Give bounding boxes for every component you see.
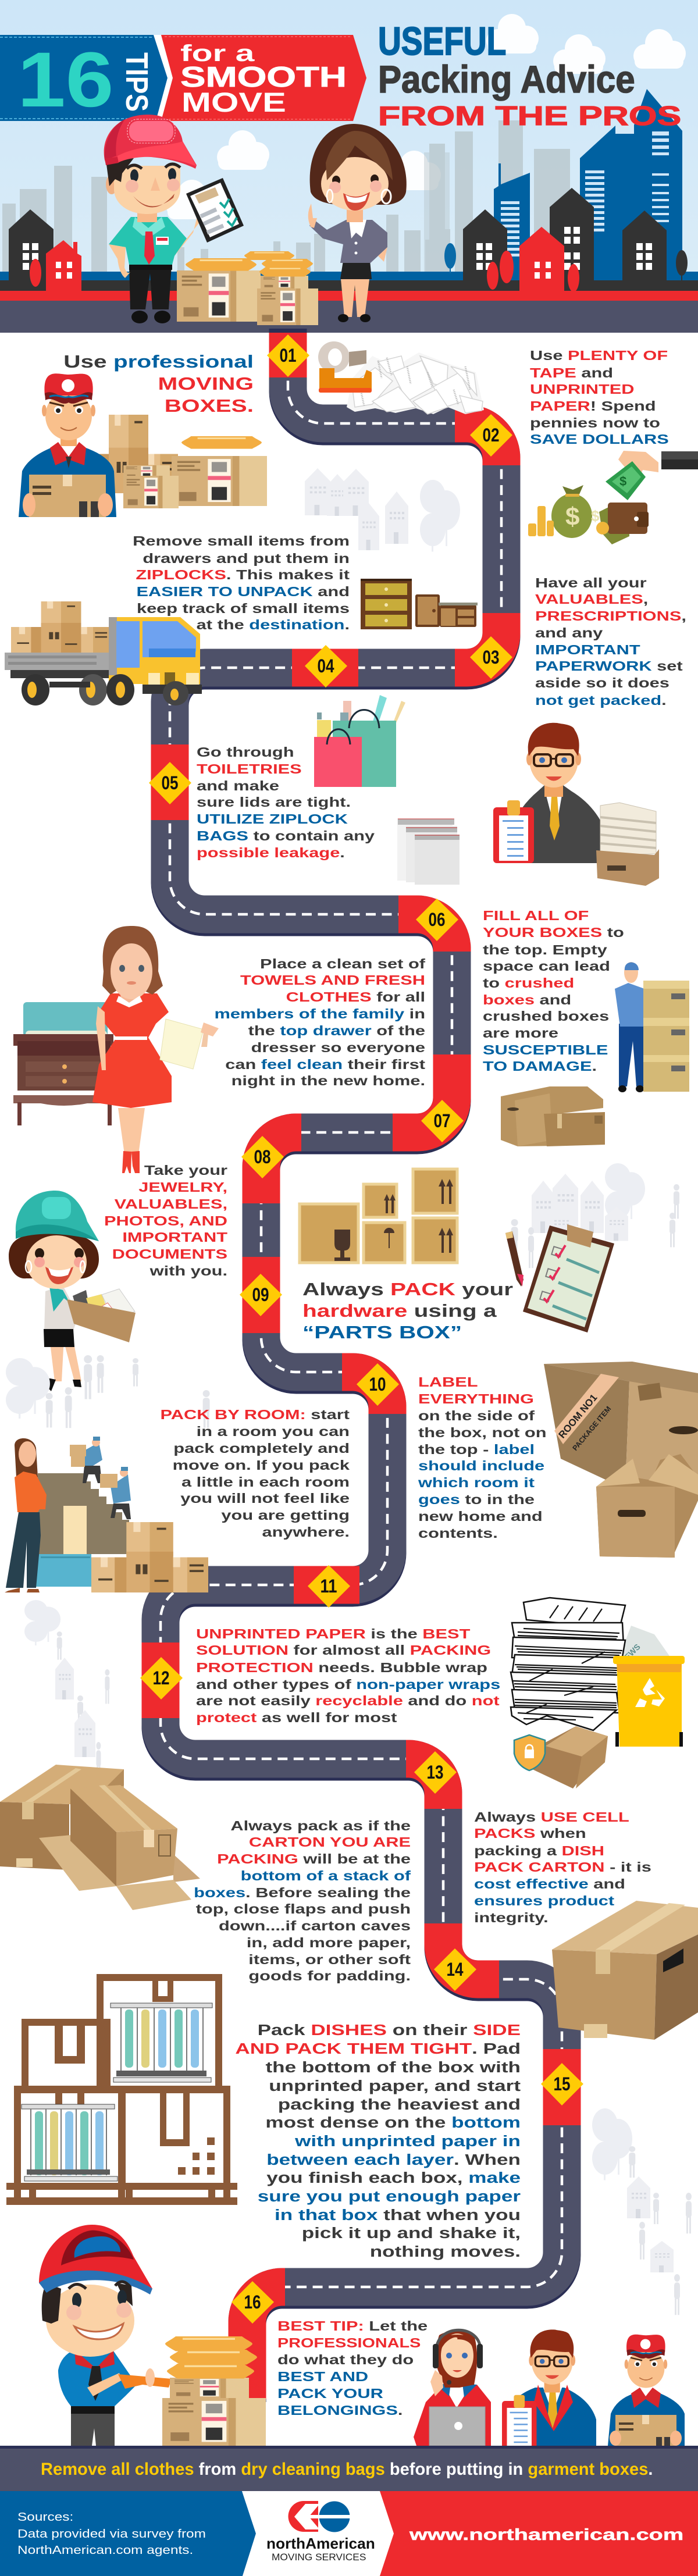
tip 07 text: TOWELS AND FRESH xyxy=(240,972,425,988)
title: useful packing advice from the pros: USEFUL xyxy=(378,20,506,63)
tip 12 text: are not easily recyclable and do not xyxy=(196,1693,500,1708)
tip 02 text: TAPE and xyxy=(530,365,613,380)
tip 13 text: down....if carton caves xyxy=(219,1918,411,1933)
tip 10 text: should include xyxy=(418,1458,544,1473)
tip 14 text: PACKS when xyxy=(474,1826,586,1841)
tip 02 text: SAVE DOLLARS xyxy=(530,432,669,447)
tip 09 text: “PARTS BOX” xyxy=(302,1323,462,1342)
tip 01 text: MOVING xyxy=(158,374,254,394)
tip 08 text: VALUABLES, xyxy=(115,1196,227,1212)
illustration: parts boxes xyxy=(300,1169,457,1263)
tip 02 text: Use PLENTY OF xyxy=(530,348,668,363)
tip 09 text xyxy=(302,1280,513,1342)
footer: sources panel: NorthAmerican.com agents. xyxy=(17,2543,193,2556)
tip 04 text: Remove small items from xyxy=(133,533,350,548)
tip 11 text: a little in each room xyxy=(181,1474,350,1490)
tip 05 text: and make xyxy=(197,778,279,793)
illustration: money bags, wallet and hand with cash: $ xyxy=(565,503,579,531)
tip 10 text: EVERYTHING xyxy=(418,1391,534,1406)
illustration: mover holding box with stacked boxes xyxy=(19,373,267,517)
tip 01 text: Use professional xyxy=(63,352,254,372)
tip 03 text: Have all your xyxy=(535,575,647,590)
footer: website panel xyxy=(380,2491,698,2576)
illustration: mover taping boxes xyxy=(39,2225,266,2446)
tip 16 text: do what they do xyxy=(277,2352,414,2367)
illustration: collapsed carton boxes xyxy=(0,1765,200,1910)
tip 16 text: BEST TIP: Let the xyxy=(277,2318,428,2333)
illustration: ziplock bags xyxy=(397,818,460,885)
step number diamonds 01 to 16 xyxy=(140,334,583,2324)
tip 12 text xyxy=(196,1626,500,1725)
tip 15 text: in that box that when you xyxy=(275,2206,521,2224)
tip 08 text: with you. xyxy=(149,1263,227,1278)
tip 15 text: AND PACK THEM TIGHT. Pad xyxy=(235,2040,521,2057)
tip 06 text: space can lead xyxy=(483,959,610,974)
tip 01 text: BOXES. xyxy=(165,396,254,416)
tip 15 text: Pack DISHES on their SIDE xyxy=(258,2021,521,2039)
tip 13 text: boxes. Before sealing the xyxy=(194,1885,411,1900)
title: useful packing advice from the pros xyxy=(378,20,681,131)
tip 15 text: between each layer. When xyxy=(266,2151,521,2168)
header stacked boxes xyxy=(177,251,318,325)
tip 13 text: CARTON YOU ARE xyxy=(249,1834,411,1850)
footer: logo xyxy=(242,2491,394,2576)
tip 10 text: which room it xyxy=(418,1475,535,1490)
tip 04 text: drawers and put them in xyxy=(143,551,350,566)
tip 03 text: VALUABLES, xyxy=(535,592,648,607)
illustration: moving truck xyxy=(5,601,202,706)
step number diamonds 01 to 16: 06 xyxy=(428,909,446,930)
tip 11 text xyxy=(161,1407,350,1540)
tip 14 text xyxy=(474,1809,651,1925)
tip 04 text: EASIER TO UNPACK and xyxy=(137,584,350,599)
tip 12 text: and other types of non-paper wraps xyxy=(196,1677,500,1692)
illustration: team of three professionals xyxy=(414,2329,685,2449)
illustration: woman with teal cap carrying documents box xyxy=(9,1191,136,1391)
tip 05 text: UTILIZE ZIPLOCK xyxy=(197,811,348,826)
tip 15 text: nothing moves. xyxy=(370,2243,521,2260)
step number diamonds 01 to 16: 16 xyxy=(244,2292,261,2313)
title: useful packing advice from the pros: Packing Advice xyxy=(378,58,635,101)
tip 06 text: the top. Empty xyxy=(483,942,608,957)
tip 07 text: dresser so everyone xyxy=(251,1040,425,1055)
tip 06 text xyxy=(483,908,624,1074)
tip 02 text: UNPRINTED xyxy=(530,382,635,397)
tip 12 text: SOLUTION for almost all PACKING xyxy=(196,1642,491,1658)
tip 04 text xyxy=(133,533,350,632)
step number diamonds 01 to 16: 14 xyxy=(447,1959,464,1980)
illustration: money bags, wallet and hand with cash: $ xyxy=(591,507,600,525)
tip 10 text: new home and xyxy=(418,1509,543,1524)
tip 03 text: IMPORTANT xyxy=(535,642,640,657)
tip 11 text: you will not feel like xyxy=(180,1491,350,1506)
tip 15 text: unprinted paper, and start xyxy=(269,2077,521,2094)
title banner: 16 tips for a smooth move: MOVE xyxy=(181,87,286,117)
tip 07 text: night in the new home. xyxy=(232,1073,425,1088)
winding road with numbered stops xyxy=(161,329,562,2402)
title banner: 16 tips for a smooth move xyxy=(0,35,366,123)
tip 14 text: cost effective and xyxy=(474,1876,625,1891)
step number diamonds 01 to 16: 03 xyxy=(483,647,499,668)
tip 15 text: with unprinted paper in xyxy=(294,2132,521,2150)
tip 14 text: ensures product xyxy=(474,1893,614,1908)
tip 13 text: goods for padding. xyxy=(248,1968,411,1983)
illustration: pale neighbourhood xyxy=(305,468,460,551)
tip 05 text: sure lids are tight. xyxy=(197,794,351,810)
footer: sources panel: Sources: xyxy=(17,2510,73,2523)
tip 11 text: move on. If you pack xyxy=(173,1458,350,1473)
tip 16 text xyxy=(277,2318,428,2418)
footer: logo: northAmerican xyxy=(266,2535,375,2552)
header background panel xyxy=(0,0,698,333)
tip 05 text: BAGS to contain any xyxy=(197,828,375,843)
tip 07 text: CLOTHES for all xyxy=(286,989,425,1004)
tip 08 text: JEWELRY, xyxy=(138,1180,227,1195)
step number diamonds 01 to 16: 13 xyxy=(427,1762,443,1783)
tip 02 text xyxy=(530,348,669,447)
tip 16 text: PACK YOUR xyxy=(277,2386,383,2401)
title banner: 16 tips for a smooth move: for a xyxy=(180,40,255,66)
illustration: tape dispenser and crumpled paper xyxy=(318,341,484,414)
illustration: large labelled boxes xyxy=(544,1362,698,1558)
illustration: large carton box xyxy=(552,1901,698,2040)
title banner: 16 tips for a smooth move: TIPS xyxy=(119,52,154,112)
illustration: woman, stairs, movers and boxes xyxy=(5,1437,208,1592)
title banner: 16 tips for a smooth move: 16 xyxy=(17,36,113,123)
illustration: dresser and cabinet xyxy=(361,579,478,629)
tip 02 text: PAPER! Spend xyxy=(530,398,656,414)
tip 08 text: DOCUMENTS xyxy=(112,1246,227,1262)
tip 16 text: BELONGINGS. xyxy=(277,2403,403,2418)
tip 14 text: PACK CARTON - it is xyxy=(474,1859,651,1875)
tip 10 text: the box, not on xyxy=(418,1425,547,1440)
tip 15 text: sure you put enough paper xyxy=(258,2187,521,2205)
illustration: money bags, wallet and hand with cash: $ xyxy=(619,474,626,489)
tip 03 text: and any xyxy=(535,625,603,640)
illustration: woman in red dress with towel and dresser xyxy=(13,926,219,1173)
tip 12 text: PROTECTION needs. Bubble wrap xyxy=(196,1660,487,1675)
tip 04 text: at the destination. xyxy=(197,617,350,632)
tip 10 text: goes to in the xyxy=(418,1492,535,1507)
tip 12 text: protect as well for most xyxy=(196,1710,397,1725)
tip 05 text: Go through xyxy=(197,744,294,760)
tip 06 text: YOUR BOXES to xyxy=(483,925,624,940)
tip 11 text: in a room you can xyxy=(197,1424,350,1439)
tip 15 text: the bottom of the box with xyxy=(265,2058,521,2076)
tip 06 text: crushed boxes xyxy=(483,1009,609,1024)
tip 08 text xyxy=(104,1163,227,1278)
tip 12 text: UNPRINTED PAPER is the BEST xyxy=(196,1626,471,1641)
tip 11 text: pack completely and xyxy=(173,1441,350,1456)
tip 15 text: most dense on the bottom xyxy=(265,2114,521,2131)
tip 15 text: packing the heaviest and xyxy=(278,2096,521,2113)
tip 09 text: Always PACK your xyxy=(302,1280,513,1299)
tip 08 text: PHOTOS, AND xyxy=(104,1213,227,1228)
step number diamonds 01 to 16: 04 xyxy=(318,655,334,676)
tip 03 text: PAPERWORK set xyxy=(535,658,683,674)
tip 07 text: can feel clean their first xyxy=(225,1057,425,1072)
tip 03 text: PRESCRIPTIONS, xyxy=(535,608,686,623)
step number diamonds 01 to 16: 12 xyxy=(152,1668,170,1688)
step number diamonds 01 to 16: 08 xyxy=(254,1146,271,1167)
tip 10 text: the top - label xyxy=(418,1442,535,1457)
illustration: large labelled boxes: ROOM NO1 xyxy=(557,1392,600,1441)
footer: logo: MOVING SERVICES xyxy=(272,2551,366,2563)
tip 08 text: IMPORTANT xyxy=(122,1230,227,1245)
illustration: crushed cardboard boxes xyxy=(501,1086,605,1146)
tip 04 text: ZIPLOCKS. This makes it xyxy=(136,567,350,582)
title banner: 16 tips for a smooth move: SMOOTH xyxy=(180,62,347,93)
character: businesswoman pointing xyxy=(308,124,407,322)
illustration: businessman with clipboard and paper box xyxy=(493,723,659,886)
tip 11 text: PACK BY ROOM: start xyxy=(161,1407,350,1422)
tip 13 text: items, or other soft xyxy=(248,1952,411,1967)
tip 15 text: you finish each box, make xyxy=(266,2169,521,2186)
step number diamonds 01 to 16: 01 xyxy=(279,345,297,366)
illustration: pale figures beside road xyxy=(592,2108,692,2315)
tip 16 text: PROFESSIONALS xyxy=(277,2335,421,2350)
tip 13 text: in, add more paper, xyxy=(247,1935,411,1950)
tip 07 text: Place a clean set of xyxy=(260,956,426,971)
tip 15 text: pick it up and shake it, xyxy=(302,2224,521,2242)
illustration: checklist clipboard and pencil with pale town xyxy=(505,1163,679,1332)
step number diamonds 01 to 16: 05 xyxy=(162,772,178,793)
tip 13 text xyxy=(194,1818,411,1983)
tip 06 text: FILL ALL OF xyxy=(483,908,589,923)
tip 09 text: hardware using a xyxy=(302,1301,497,1321)
tip 05 text xyxy=(197,744,375,860)
step number diamonds 01 to 16: 07 xyxy=(434,1110,450,1131)
tip 01 text xyxy=(63,352,254,416)
step number diamonds 01 to 16: 11 xyxy=(320,1576,337,1597)
step number diamonds 01 to 16: 15 xyxy=(554,2073,570,2094)
tip 07 text: the top drawer of the xyxy=(248,1023,425,1038)
illustration: dish pack racks xyxy=(6,1974,237,2205)
step number diamonds 01 to 16: 02 xyxy=(483,425,499,446)
tip 06 text: boxes and xyxy=(483,992,571,1007)
tip 06 text: TO DAMAGE. xyxy=(483,1059,597,1074)
tip 08 text: Take your xyxy=(144,1163,227,1178)
footer: sources panel: Data provided via survey from xyxy=(17,2527,206,2540)
tip 05 text: TOILETRIES xyxy=(197,761,302,776)
illustration: shopping bags with toiletries xyxy=(314,695,405,787)
illustration: pale neighbourhood figures xyxy=(6,1355,210,1783)
tip 06 text: are more xyxy=(483,1025,558,1041)
tip 10 text: LABEL xyxy=(418,1374,478,1389)
tip 07 text: members of the family in xyxy=(214,1006,425,1021)
footer: sources panel xyxy=(0,2491,256,2576)
tip 14 text: packing a DISH xyxy=(474,1843,604,1858)
tip 11 text: anywhere. xyxy=(262,1524,350,1540)
tip 11 text: you are getting xyxy=(221,1508,350,1523)
tip 16 text: BEST AND xyxy=(277,2369,368,2384)
tip 02 text: pennies now to xyxy=(530,415,660,430)
tip 15 text xyxy=(235,2021,521,2260)
tip 07 text xyxy=(214,956,426,1088)
tip 03 text: aside so it does xyxy=(535,675,669,690)
illustration: paper pile, newspaper and recycling bin xyxy=(511,1598,685,1788)
tip 05 text: possible leakage. xyxy=(197,845,345,860)
tip 03 text: not get packed. xyxy=(535,693,667,708)
title: useful packing advice from the pros: FROM THE PROS xyxy=(378,101,681,131)
tip 13 text: top, close flaps and push xyxy=(196,1901,411,1916)
tip 10 text: on the side of xyxy=(418,1408,535,1423)
tip 14 text: Always USE CELL xyxy=(474,1809,629,1825)
tip 03 text xyxy=(535,575,686,708)
tip 14 text: integrity. xyxy=(474,1910,549,1925)
character: mover with clipboard xyxy=(104,115,244,323)
bottom tip band xyxy=(0,2446,698,2491)
tip 13 text: PACKING will be at the xyxy=(217,1851,411,1866)
illustration: large labelled boxes: PACKAGE ITEM xyxy=(571,1405,612,1452)
step number diamonds 01 to 16: 10 xyxy=(369,1374,386,1395)
tip 10 text: contents. xyxy=(418,1526,498,1541)
tip 13 text: bottom of a stack of xyxy=(241,1868,411,1883)
illustration: mover with tall boxes xyxy=(615,962,689,1092)
tip 06 text: SUSCEPTIBLE xyxy=(483,1042,608,1057)
tip 13 text: Always pack as if the xyxy=(230,1818,411,1833)
illustration: paper pile, newspaper and recycling bin: NEWS xyxy=(618,1642,642,1666)
tip 04 text: keep track of small items xyxy=(137,601,350,616)
step number diamonds 01 to 16: 09 xyxy=(252,1284,269,1305)
tip 10 text xyxy=(418,1374,547,1541)
illustration: money bags, wallet and hand with cash xyxy=(528,451,698,544)
bottom tip band: Remove all clothes from dry cleaning bags before putting in garment boxes. xyxy=(41,2460,653,2479)
footer: website panel: www.northamerican.com xyxy=(409,2526,683,2544)
tip 06 text: to crushed xyxy=(483,975,574,991)
